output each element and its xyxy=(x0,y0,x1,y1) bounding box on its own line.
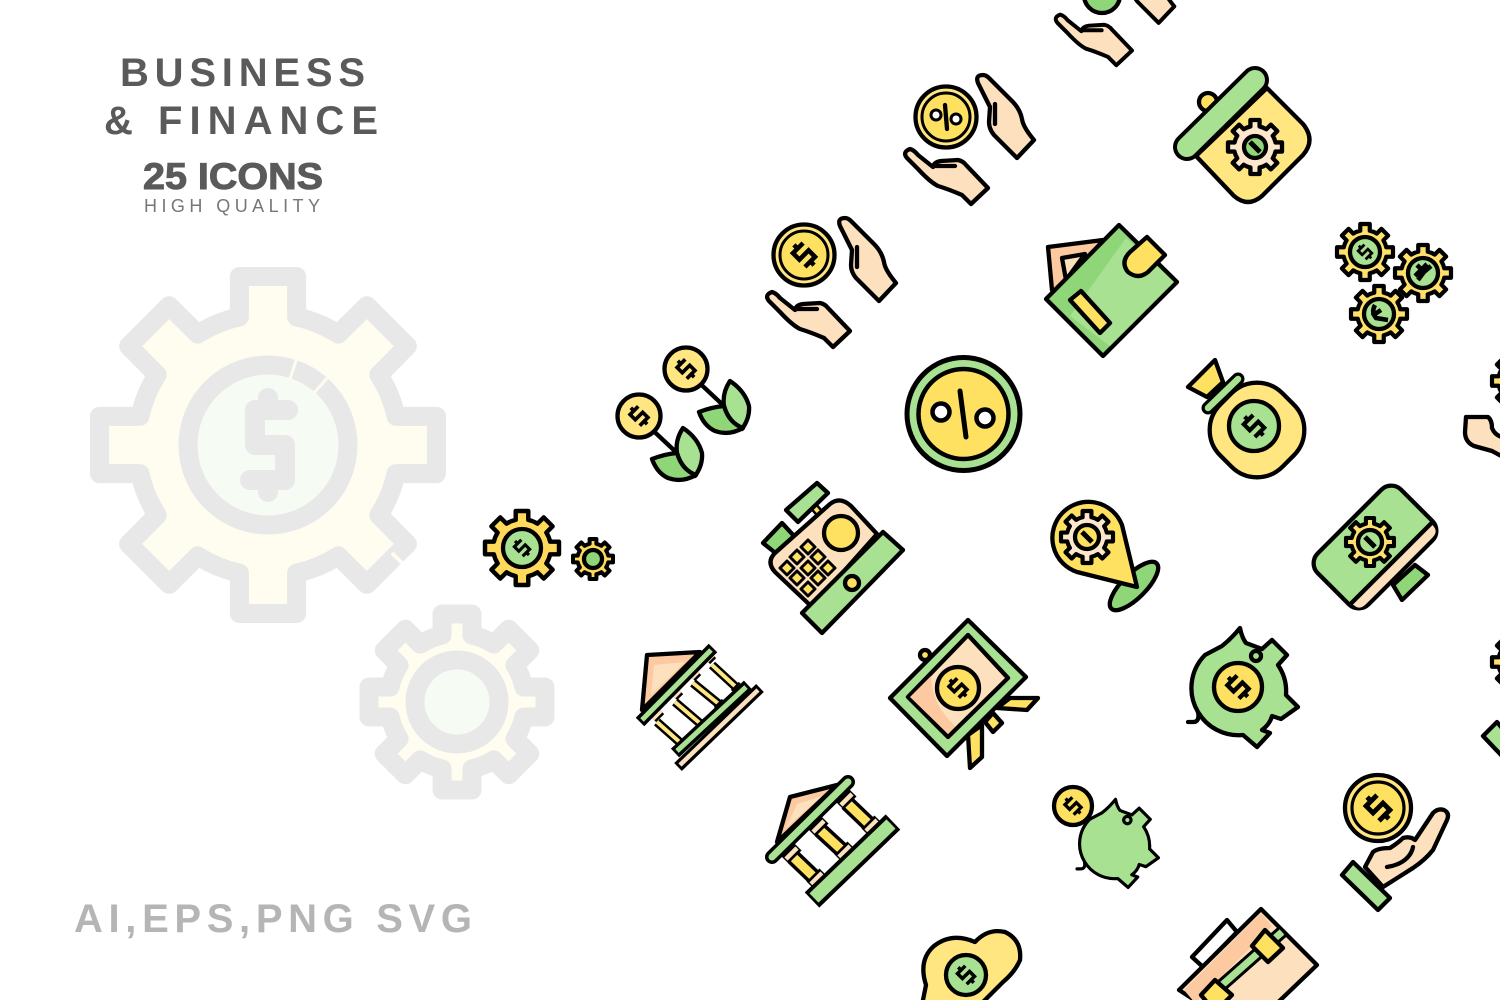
icon: piggy bank with coin xyxy=(1188,628,1298,747)
icon: book with gear xyxy=(1308,480,1442,614)
icon: money bag xyxy=(1188,360,1319,492)
heading: business: BUSINESS xyxy=(120,51,365,95)
icon: bank with three columns xyxy=(772,782,893,900)
icon: partial hand at right edge xyxy=(1465,353,1500,458)
icon: two gears xyxy=(485,511,613,585)
icon: coin plants xyxy=(618,348,749,480)
icon: presentation board xyxy=(890,620,1038,768)
icon: dollar coin in hands xyxy=(767,218,896,347)
text: file formats: AI,EPS,PNG SVG xyxy=(74,897,472,941)
icon: coin in hands cropped at top xyxy=(1056,0,1174,65)
subheading: high quality: HIGH QUALITY xyxy=(144,196,320,216)
icon: money cloud xyxy=(922,931,1020,1000)
icon: bank with four columns xyxy=(640,648,760,767)
icon: percent coin in hands xyxy=(905,75,1034,204)
icon: coin on open hand xyxy=(1342,775,1448,910)
heading: 25 icons: 25 ICONS xyxy=(143,156,323,197)
icon: wallet xyxy=(1046,225,1177,356)
icon: percent medal xyxy=(907,358,1020,470)
icon: briefcase xyxy=(1179,909,1317,1000)
icon: location pin with gear xyxy=(1052,502,1165,617)
keypad xyxy=(780,540,835,596)
heading: and finance: & FINANCE xyxy=(104,99,378,143)
title: business and finance xyxy=(104,51,378,216)
background gear: small xyxy=(369,614,545,790)
icon: jar with gear xyxy=(1187,80,1310,202)
icon: cash register xyxy=(763,483,903,633)
icon: gear trio xyxy=(1337,224,1451,342)
icon: piggy bank with falling coin xyxy=(1054,787,1158,887)
background gear: large dollar xyxy=(100,276,437,614)
icon: partial gear and green shape at right edge xyxy=(1483,634,1500,756)
